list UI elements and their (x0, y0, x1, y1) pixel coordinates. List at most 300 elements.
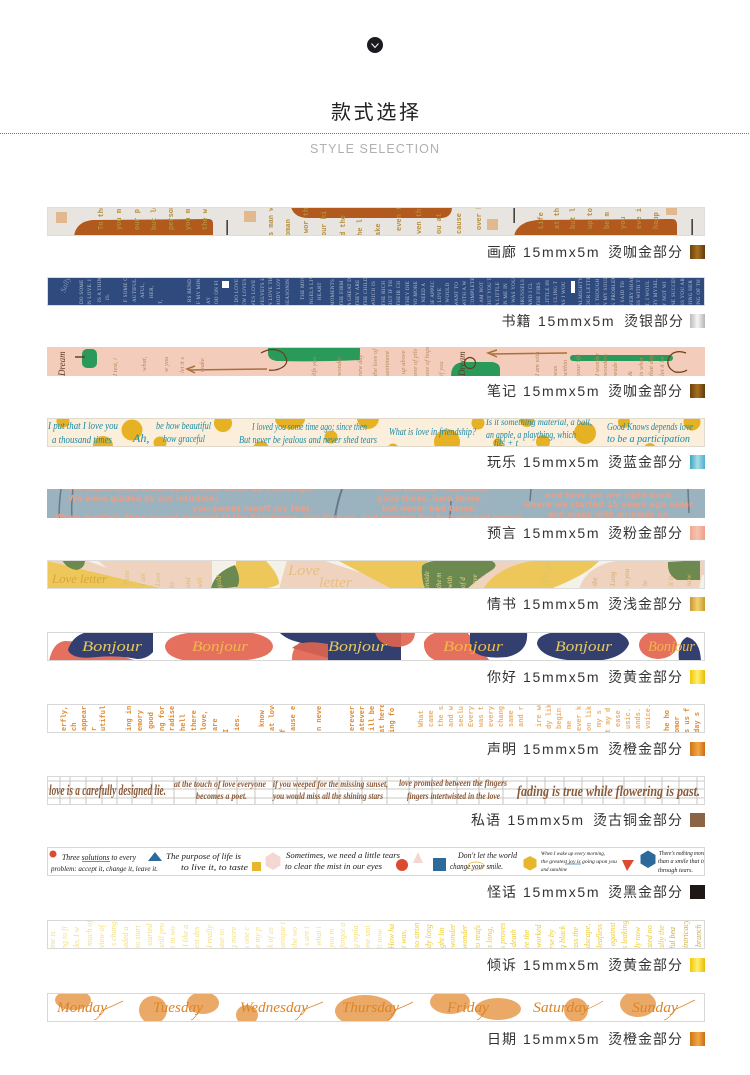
geometric shapes (50, 850, 656, 871)
vertical orange text: radise (169, 706, 177, 731)
vertical orange text: emory (137, 709, 145, 731)
vertical orange text: t my d (605, 708, 613, 733)
orange script days: Monday (56, 1000, 107, 1016)
vertical yellow text (48, 917, 703, 950)
vertical book text: THE RICH (382, 281, 387, 306)
vertical gold notes: will (196, 577, 204, 588)
vertical book text: I CLING T (554, 281, 559, 306)
vertical orange text: erever (349, 706, 357, 731)
icon: down chevron badge (367, 37, 383, 53)
label: notes: 15mmx5m (523, 383, 600, 399)
brown script: if you weeped for the missing sunset, (273, 779, 388, 789)
vertical text: he l (357, 219, 365, 236)
vertical orange text: there (191, 710, 199, 731)
vertical orange text: know (259, 709, 267, 727)
vertical text: but li (570, 204, 578, 229)
vertical book text: THEY DIE (406, 281, 411, 306)
handwritten vertical notes: make (199, 358, 206, 372)
handwritten vertical notes: sentiment (384, 351, 391, 376)
vertical orange text: ch (71, 723, 79, 731)
vertical yellow text: still pro (157, 923, 166, 948)
handwritten vertical notes: one of hope (424, 346, 431, 376)
teal script: be how beautiful (156, 421, 211, 432)
vertical book text: OF APPEC (431, 280, 436, 306)
vertical book text: LITTLE IN (546, 280, 551, 306)
vertical book text: DO SOME (80, 280, 85, 304)
vertical book text: AUTIFUL, (133, 277, 138, 302)
vertical book text: I AM NOT (480, 281, 485, 306)
teal script: Good Knows depends love (607, 422, 693, 433)
label: love letter: 情书 (487, 596, 517, 612)
handwritten lines: and sunshine (541, 867, 568, 873)
gold script: Bonjour (328, 639, 387, 655)
vertical book text: ING OF TH (697, 279, 702, 306)
label: weird talk: 烫黑金部分 (608, 884, 683, 900)
vertical gold notes: Love (154, 572, 162, 587)
teal script: But never be jealous and never shed tears (239, 435, 377, 446)
vertical yellow text: worked (534, 923, 543, 948)
teal script: fits + t (494, 438, 519, 448)
handwritten vertical notes: life you (311, 356, 318, 376)
vertical yellow text: the wo (290, 927, 299, 948)
vertical yellow text: wonder (448, 923, 457, 948)
grid (47, 776, 705, 805)
tape 9: whisper (47, 776, 705, 805)
teal script: a thousand times (52, 435, 112, 446)
handwritten lines: Don't let the world (457, 851, 518, 860)
label: play (487, 454, 705, 470)
vertical orange text: Every (468, 705, 476, 727)
handwritten vertical notes: I wonder (594, 352, 601, 377)
vertical text: you m (116, 209, 124, 230)
vertical yellow text: re the (522, 929, 531, 948)
label: whisper: 15mmx5m (508, 812, 585, 828)
vertical book text: AY (207, 297, 212, 304)
vertical yellow text: How ha (387, 924, 396, 950)
vertical orange text: ands. (635, 708, 643, 729)
gold script: Bonjour (555, 639, 612, 655)
tape 3: notes (47, 346, 705, 377)
label: gallery: 15mmx5m (523, 244, 600, 260)
orange script days: Sunday (632, 1000, 678, 1016)
vertical yellow text: ly now (633, 926, 642, 948)
vertical text: at th (554, 208, 562, 229)
teal script: to be a participation (607, 434, 690, 445)
vertical orange text: ies. (234, 714, 242, 731)
handwritten vertical notes: the love of (372, 348, 379, 376)
vertical book text: I LOVE (438, 288, 443, 306)
vertical book text: OUR LETTE (587, 276, 592, 306)
vertical book text: T, (159, 299, 164, 304)
handwritten vertical notes: let it s (179, 357, 186, 373)
tape 12: dates (47, 990, 705, 1027)
gold script: Bonjour (648, 639, 695, 655)
label: prophecy: 15mmx5m (523, 525, 600, 541)
vertical orange text: ing fo (389, 708, 397, 733)
vertical yellow text: s proves (498, 923, 507, 949)
handwritten vertical notes: if you (438, 361, 445, 376)
vertical book text: BODY LOVE (277, 275, 282, 306)
vertical book text: N MY SOUL (604, 276, 609, 306)
brown script: love is a carefully designed lie. (49, 783, 166, 799)
vertical yellow text: ase to (217, 929, 226, 948)
orange script days: Thursday (342, 1000, 399, 1016)
vertical book text: K PROBLEM (612, 275, 617, 306)
handwritten lines: through tears. (658, 868, 693, 874)
salmon lines: When married, then we got married at the Stayhouse. Our love so (55, 513, 355, 522)
vertical orange text: erfly, (61, 706, 69, 731)
handwritten vertical notes: that day (648, 355, 655, 376)
vertical yellow text: against (608, 922, 617, 946)
handwritten vertical notes: let it be (659, 356, 666, 376)
salmon lines: you sweet meoff my feet. (192, 504, 313, 513)
peach blob (579, 560, 705, 589)
gold script: Bonjour (192, 639, 248, 655)
vertical gold notes: Long (609, 571, 617, 587)
vertical orange text: omor (674, 716, 682, 733)
label: gallery: 烫咖金部分 (608, 244, 683, 260)
vertical orange text: r (91, 727, 99, 731)
handwritten lines: When I wake up every morning, (541, 851, 606, 857)
vertical yellow text: ful bea (668, 927, 677, 949)
teal script: What is love in friendship? (389, 427, 477, 438)
label: statement: 烫橙金部分 (608, 741, 683, 757)
vertical gold notes: There (123, 570, 131, 586)
vertical yellow text: to start (133, 924, 142, 948)
vertical yellow text: k of us (266, 927, 275, 948)
label: dates (487, 1031, 705, 1047)
vertical yellow text: t was, (399, 929, 408, 948)
vertical orange text: came (428, 710, 436, 727)
vertical book text: IS. (106, 293, 111, 300)
vertical orange text: chang (498, 706, 506, 727)
vertical orange text: seclu (458, 706, 466, 727)
vertical yellow text: ght lin (437, 927, 446, 948)
tape 2: books (47, 277, 705, 306)
vertical yellow text: leafless (595, 924, 604, 948)
salmon lines: We didn't know much about each other 15 years ago. (68, 484, 314, 493)
vertical book text: MOMENTS (331, 279, 336, 306)
gold script: Love (287, 563, 320, 579)
label: whisper: 烫古铜金部分 (593, 812, 683, 828)
vertical orange text (60, 705, 700, 732)
handwritten vertical notes: I am with (534, 351, 541, 377)
vertical orange text: my s (596, 710, 604, 727)
handwritten lines: the greatest joy is going upon you (541, 859, 617, 865)
vertical text: oman (285, 219, 293, 236)
vertical gold notes: it is (667, 575, 675, 586)
teal script: Is it something material, a ball, (485, 417, 592, 427)
vertical book text: COMPLETE (471, 277, 476, 306)
vertical text (98, 208, 660, 235)
handwritten vertical notes: one of pile (412, 348, 419, 376)
vertical orange text: begin (556, 708, 564, 729)
vertical orange text: good (148, 712, 156, 729)
tape 6: love letter (47, 560, 705, 589)
salmon lines: where we started 15 years ago older (523, 500, 693, 509)
handwritten lines: The purpose of life is (166, 851, 242, 861)
handwritten vertical notes: wonder (336, 356, 343, 376)
label: prophecy (487, 525, 705, 541)
vertical yellow text: aded a (121, 926, 130, 948)
vertical orange text: ng for (159, 706, 167, 731)
vertical orange text: f (280, 729, 288, 733)
vertical yellow text: I really (205, 925, 214, 949)
vertical text: happ (653, 212, 661, 229)
vertical gold notes: of d (459, 577, 467, 588)
vertical text: ven th (416, 209, 424, 234)
label: love letter: 烫浅金部分 (608, 596, 683, 612)
teal script: an apple, a plaything, which (486, 430, 576, 441)
vertical orange text: love, (201, 710, 209, 731)
handwritten lines: problem: accept it, change it, leave it. (50, 864, 158, 873)
label: weird talk: 15mmx5m (523, 884, 600, 900)
vertical book text: EW LOVES (243, 279, 248, 306)
vertical orange text: at here (379, 704, 387, 733)
label: play: 玩乐 (487, 454, 517, 470)
vertical orange text: n neve (316, 706, 324, 731)
label: hello (487, 669, 705, 685)
vertical book text: T, I WOUL (646, 280, 651, 306)
vertical text: To the (98, 205, 106, 230)
vertical text: Life is (538, 200, 546, 229)
label: whisper: 私语 (471, 812, 501, 828)
handwritten vertical notes: within (562, 360, 569, 376)
label: notes: 烫咖金部分 (608, 383, 683, 399)
vertical orange text: hell (180, 714, 188, 731)
vertical book text: BRUSSELS (521, 279, 526, 306)
brown script (49, 778, 700, 801)
vertical yellow text: me smi (363, 926, 372, 948)
vertical book text: VELVETS LO (261, 273, 266, 306)
underline accents (82, 862, 581, 864)
gold script: letter (319, 575, 352, 591)
handwritten lines: Sometimes, we need a little tears (286, 850, 401, 860)
vertical text: over ki (476, 201, 484, 230)
label: dates: 烫橙金部分 (608, 1031, 683, 1047)
vertical orange text: was t (478, 706, 486, 727)
vertical orange text: ire wo (536, 702, 544, 727)
vertical book text: A LITTLE (496, 282, 501, 306)
salmon lines: and moment has had and and sorrow (362, 513, 522, 522)
vertical gold notes: with (446, 575, 454, 588)
vertical yellow text: ng to fi (60, 926, 69, 949)
vertical yellow text: g repla (351, 925, 360, 948)
handwritten vertical notes: I test, i (112, 358, 119, 377)
vertical gold notes (123, 568, 693, 589)
vertical orange text: day s (694, 712, 702, 733)
vertical gold notes: now (685, 574, 693, 586)
vertical orange text: atever (359, 706, 367, 731)
orange script days: Saturday (533, 1000, 589, 1016)
brown script: becomes a poet. (196, 791, 247, 801)
brown shapes (74, 207, 677, 236)
vertical book text: IS A THIN (98, 277, 103, 302)
vertical book text: NO MORE (414, 281, 419, 306)
vertical yellow text: ally the (657, 925, 666, 949)
label: play: 15mmx5m (523, 454, 600, 470)
vertical yellow text: unique t (278, 921, 287, 948)
vertical yellow text: it now (375, 929, 384, 949)
vertical book text: NGELS LIV (310, 276, 315, 304)
label: confide: 倾诉 (487, 957, 517, 973)
vertical gold notes: to you (623, 568, 631, 586)
handwritten vertical notes: your life (575, 354, 582, 377)
gold script: letter (535, 556, 557, 588)
vertical text: person (168, 205, 176, 230)
label: notes (487, 383, 705, 399)
black bars (226, 208, 693, 235)
vertical orange text: ease (615, 710, 623, 727)
tape 7: hello (47, 632, 705, 661)
vertical text: you m (185, 209, 193, 230)
label: gallery (487, 244, 705, 260)
vertical book text: THE FIRS (537, 282, 542, 306)
white markers (222, 281, 575, 293)
vertical book text: I SAID TH (621, 281, 626, 306)
vertical orange text: I (223, 729, 231, 733)
vertical yellow text: started (145, 923, 154, 946)
vertical yellow text: ass the (571, 927, 580, 949)
vertical yellow text: death (509, 929, 518, 947)
vertical book text: SS YOU AR (681, 278, 686, 306)
label: dates: 日期 (487, 1031, 517, 1047)
label: whisper (471, 812, 705, 828)
vertical orange text: ever k (576, 706, 584, 731)
vertical yellow text: forgot a (338, 923, 347, 948)
dark brush strokes (59, 489, 689, 518)
salmon lines: and wiser, with wrinkles on (548, 510, 668, 519)
handwritten vertical notes: what, (141, 356, 148, 371)
vertical orange text: utiful (100, 706, 108, 731)
vertical orange text: What (418, 710, 426, 727)
handwritten lines: Three solutions to every (62, 853, 136, 862)
vertical book text: BUT IF TH (389, 280, 394, 306)
vertical book text: WHICH IS (372, 281, 377, 306)
handwritten lines: change your smile. (450, 862, 503, 871)
vertical book text: AND I CL (529, 282, 534, 306)
script tails (94, 1000, 695, 1020)
vertical text: even th (396, 202, 404, 231)
vertical book text: I WAS YOU (512, 278, 517, 306)
tape 11: confide (47, 917, 705, 950)
vertical gold notes: be (168, 581, 176, 588)
salmon lines: Years passed. Was some (376, 484, 487, 493)
vertical orange text: ing in (126, 706, 134, 731)
vertical book text: WANT TO (455, 282, 460, 306)
brown script: you would miss all the shining stars (272, 791, 383, 801)
handwritten vertical notes: was (552, 365, 559, 376)
label: play: 烫蓝金部分 (608, 454, 683, 470)
vertical yellow text: t in wo (168, 926, 177, 948)
vertical gold notes: inside (423, 571, 431, 588)
vertical yellow text: s change (109, 917, 118, 946)
vertical yellow text: e my p (253, 927, 262, 948)
label: hello: 15mmx5m (523, 669, 600, 685)
brown script: fading is true while flowering is past. (517, 784, 700, 800)
handwritten lines: to live it, to taste (181, 862, 248, 872)
vertical yellow text: s leaking (620, 920, 629, 949)
gold script: Bonjour (82, 639, 142, 655)
salmon lines: good times. hard times. (377, 494, 483, 503)
vertical text: but le (151, 205, 159, 230)
vertical book text: I DO LOVE (235, 279, 240, 306)
vertical orange text: voice. (645, 704, 653, 729)
vertical gold notes: and (184, 577, 192, 588)
vertical yellow text: dy long (424, 924, 433, 948)
vertical text: you (620, 216, 628, 229)
vertical book text: HING HER (689, 279, 694, 306)
coral blobs (49, 633, 677, 660)
label: confide: 烫黄金部分 (608, 957, 683, 973)
vertical book text (80, 278, 700, 305)
label: statement: 15mmx5m (523, 741, 600, 757)
brown script: at the touch of love everyone (174, 779, 266, 789)
label: hello: 烫黄金部分 (608, 669, 683, 685)
gold script: Love letter (51, 571, 108, 586)
vertical yellow text: s are t (302, 926, 311, 946)
vertical orange text: ause e (290, 706, 298, 731)
vertical book text: IN ME IN (504, 283, 509, 306)
vertical yellow text: branch (694, 924, 703, 947)
vertical gold notes: gold (215, 575, 223, 588)
vertical book text: F SOME O (124, 277, 129, 302)
handwritten vertical notes: up above (400, 350, 407, 374)
handwritten vertical notes: Dream (457, 351, 467, 377)
orange script days: Tuesday (153, 1000, 203, 1016)
handwritten vertical notes: wonders (602, 354, 609, 376)
handwritten vertical notes: Dream (57, 351, 67, 377)
handwritten vertical notes (57, 346, 666, 377)
handwritten lines (50, 850, 706, 874)
vertical yellow text: do, I w (72, 926, 81, 949)
vertical text: ake (375, 223, 383, 236)
vertical book text: OD ON FI (215, 280, 220, 304)
label: notes: 笔记 (487, 383, 517, 399)
vertical yellow text: s one c (242, 926, 251, 949)
orange script days: Friday (446, 1000, 489, 1016)
vertical yellow text: so stron (412, 923, 421, 948)
tape 10: weird talk (47, 847, 706, 876)
handwritten vertical notes: wade (612, 362, 619, 376)
vertical gold notes: Love (471, 574, 479, 589)
teal script (48, 419, 693, 446)
vertical orange text: dy lik (546, 704, 554, 729)
teal script: I loved you some time ago; since then (251, 422, 367, 433)
salmon lines (55, 489, 693, 518)
vertical book text: VERY SHAR (630, 275, 635, 306)
vertical orange text: the si (438, 702, 446, 727)
vertical orange text: every (488, 705, 496, 727)
vertical orange text: same (508, 710, 516, 727)
vertical orange text: on lik (586, 706, 594, 731)
label: gallery: 画廊 (487, 244, 517, 260)
vertical book text: BUT YOU T (488, 277, 493, 306)
vertical yellow text: wonder (460, 924, 469, 949)
vertical book text: THEY ARE (356, 279, 361, 306)
handwritten lines: to clear the mist in our eyes (285, 861, 383, 871)
label: love letter (487, 596, 705, 612)
vertical yellow text: s long, (485, 927, 494, 948)
brown script: love promised between the fingers (399, 778, 507, 788)
green shapes (62, 560, 700, 589)
vertical text: the w (202, 208, 210, 230)
vertical text: ou at (436, 213, 444, 234)
teal script: Ah, (132, 431, 149, 445)
handwritten lines: than a smile that is (658, 859, 706, 865)
vertical text: d the (340, 215, 348, 236)
gold script (52, 561, 553, 587)
